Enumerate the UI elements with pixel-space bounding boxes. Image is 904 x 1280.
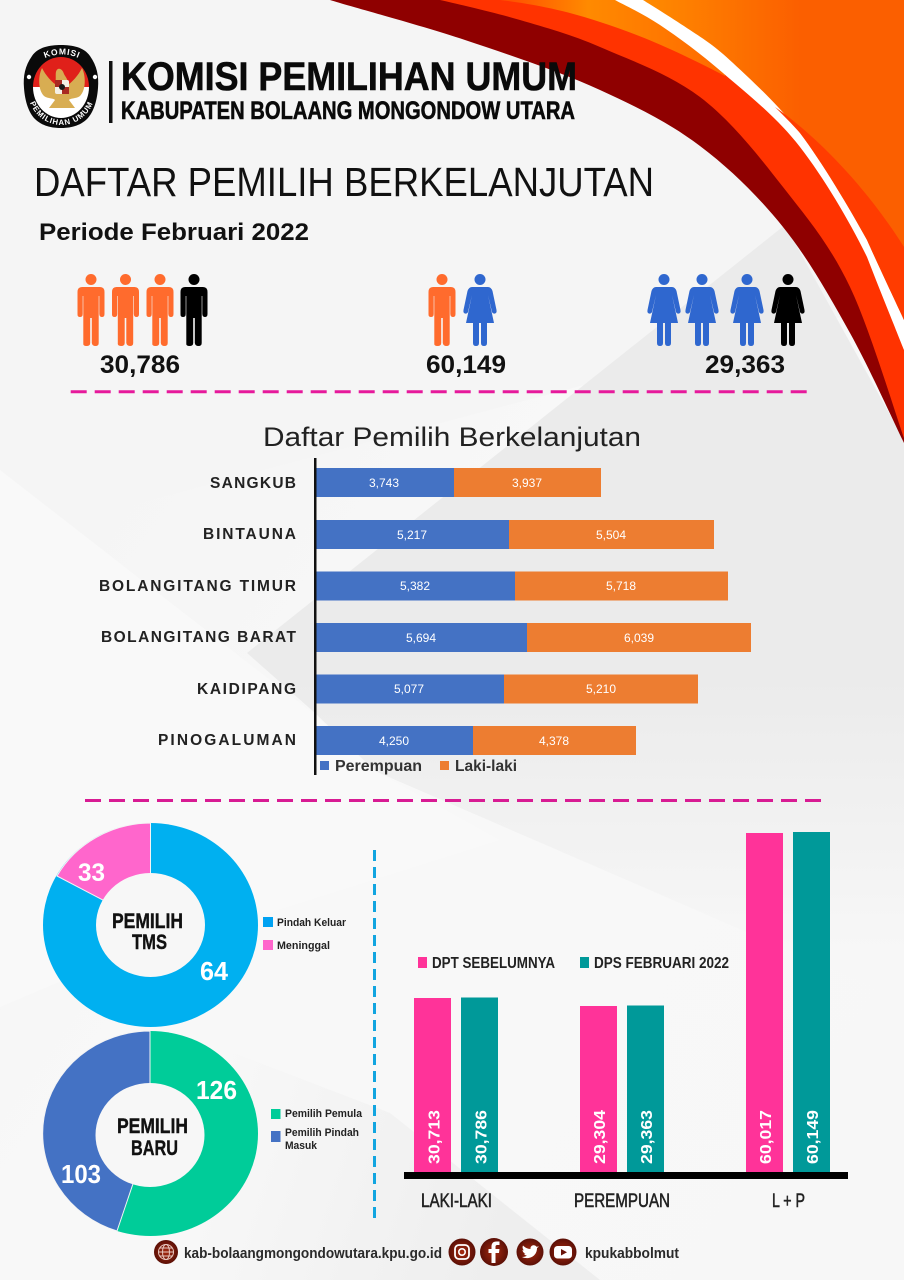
icon: facebook — [480, 1238, 508, 1266]
header divider — [109, 61, 112, 123]
row: Pinogaluman: 4,378 — [539, 734, 569, 748]
group: Laki-laki — [414, 998, 498, 1212]
legend: Pemilih TMS: Meninggal — [277, 940, 330, 952]
subtitle: period: Periode Februari 2022 — [39, 219, 309, 246]
group: Perempuan: 29,363 — [639, 1110, 656, 1164]
icon: twitter — [516, 1238, 544, 1266]
group: L + P — [746, 832, 830, 1212]
row: Sangkub: 3,937 — [512, 476, 542, 490]
donut chart: Pemilih Baru: 126 — [196, 1075, 237, 1105]
row: Bintauna: 5,217 — [397, 528, 427, 542]
stat: total voters: 60,149 — [426, 351, 506, 379]
row: Bolangitang Barat: BOLANGITANG BARAT — [101, 629, 297, 646]
column legend: DPS FEBRUARI 2022 — [594, 955, 729, 972]
row: Sangkub: SANGKUB — [210, 475, 296, 492]
row: Bintauna: 5,504 — [596, 528, 626, 542]
social handle: kpukabbolmut — [585, 1245, 679, 1262]
donut chart: Pemilih TMS: 33 — [78, 859, 105, 887]
row: Bintauna — [203, 520, 714, 549]
donut chart: Pemilih Baru: BARU — [131, 1137, 178, 1160]
legend: Pemilih Baru: Pemilih Pemula — [285, 1108, 363, 1120]
donut chart: Pemilih TMS: 64 — [200, 956, 229, 986]
row: Bintauna: BINTAUNA — [203, 526, 296, 543]
row: Kaidipang: KAIDIPANG — [197, 681, 296, 698]
group: Laki-laki: 30,786 — [474, 1110, 490, 1164]
donut chart: Pemilih Baru: 103 — [61, 1159, 101, 1189]
row: Kaidipang — [197, 674, 698, 704]
row: Sangkub — [210, 468, 601, 497]
heading: organisation name — [121, 55, 577, 125]
stat: female voters: 29,363 — [705, 351, 785, 379]
row: Bolangitang Barat: 6,039 — [624, 631, 654, 645]
heading: organisation name: KABUPATEN BOLAANG MONGONDOW UTARA — [121, 97, 575, 125]
donut chart: Pemilih Baru: PEMILIH — [117, 1115, 188, 1138]
title: DAFTAR PEMILIH BERKELANJUTAN — [34, 159, 654, 205]
donut chart: Pemilih TMS — [43, 823, 258, 1027]
stat: male voters — [77, 274, 208, 379]
legend: Pemilih TMS: Pindah Keluar — [277, 917, 347, 929]
legend: Pemilih Baru: Pemilih Pindah — [285, 1127, 359, 1139]
heading: chart title: Daftar Pemilih Berkelanjutan — [263, 422, 641, 452]
legend: Pemilih Baru — [271, 1108, 363, 1152]
icon: instagram — [448, 1238, 476, 1266]
group: Perempuan: 29,304 — [592, 1110, 609, 1164]
chart legend — [320, 758, 517, 775]
chart legend: Laki-laki — [455, 758, 517, 775]
donut chart: Pemilih TMS: PEMILIH — [112, 910, 183, 933]
website address: kab-bolaangmongondowutara.kpu.go.id — [184, 1245, 442, 1262]
column legend — [418, 955, 729, 972]
row: Bolangitang Barat — [101, 623, 751, 652]
legend: Pemilih TMS — [263, 917, 347, 952]
group: L + P: 60,149 — [805, 1110, 822, 1164]
row: Bolangitang Timur: BOLANGITANG TIMUR — [99, 578, 296, 595]
row: Bolangitang Barat: 5,694 — [406, 631, 436, 645]
group: L + P: L + P — [772, 1191, 805, 1212]
group: Laki-laki: LAKI-LAKI — [421, 1191, 492, 1212]
row: Bolangitang Timur: 5,382 — [400, 579, 430, 593]
icon: garuda — [39, 68, 85, 108]
logo: KPU emblem: PEMILIHAN UMUM — [30, 101, 92, 125]
row: Kaidipang: 5,077 — [394, 682, 424, 696]
logo: KPU emblem: KOMISI — [44, 48, 80, 58]
row: Sangkub: 3,743 — [369, 476, 399, 490]
decorative corner curves — [330, 0, 904, 443]
row: Pinogaluman: PINOGALUMAN — [158, 732, 296, 749]
group: Laki-laki: 30,713 — [426, 1110, 444, 1164]
row: Kaidipang: 5,210 — [586, 682, 616, 696]
heading: organisation name: KOMISI PEMILIHAN UMUM — [121, 55, 577, 99]
stat: total voters — [426, 274, 506, 379]
row: Pinogaluman — [158, 726, 636, 755]
row: Bolangitang Timur: 5,718 — [606, 579, 636, 593]
donut chart: Pemilih TMS: TMS — [132, 931, 167, 954]
donut chart: Pemilih Baru — [43, 1031, 258, 1236]
icon: youtube — [550, 1238, 576, 1266]
legend: Pemilih Baru: Masuk — [285, 1140, 318, 1152]
logo: KPU emblem — [24, 45, 98, 128]
group: Perempuan: PEREMPUAN — [574, 1191, 670, 1212]
row: Bolangitang Timur — [99, 572, 728, 600]
column legend: DPT SEBELUMNYA — [432, 955, 555, 972]
footer: website and social links — [154, 1238, 679, 1266]
group: Perempuan — [574, 1006, 670, 1212]
stat: male voters: 30,786 — [100, 351, 180, 379]
row: Pinogaluman: 4,250 — [379, 734, 409, 748]
icon: globe — [154, 1240, 178, 1264]
stat: female voters — [647, 274, 805, 379]
chart legend: Perempuan — [335, 758, 422, 775]
group: L + P: 60,017 — [758, 1110, 775, 1164]
column chart: DPT vs DPS — [404, 832, 848, 1212]
stacked bar chart — [99, 458, 751, 775]
